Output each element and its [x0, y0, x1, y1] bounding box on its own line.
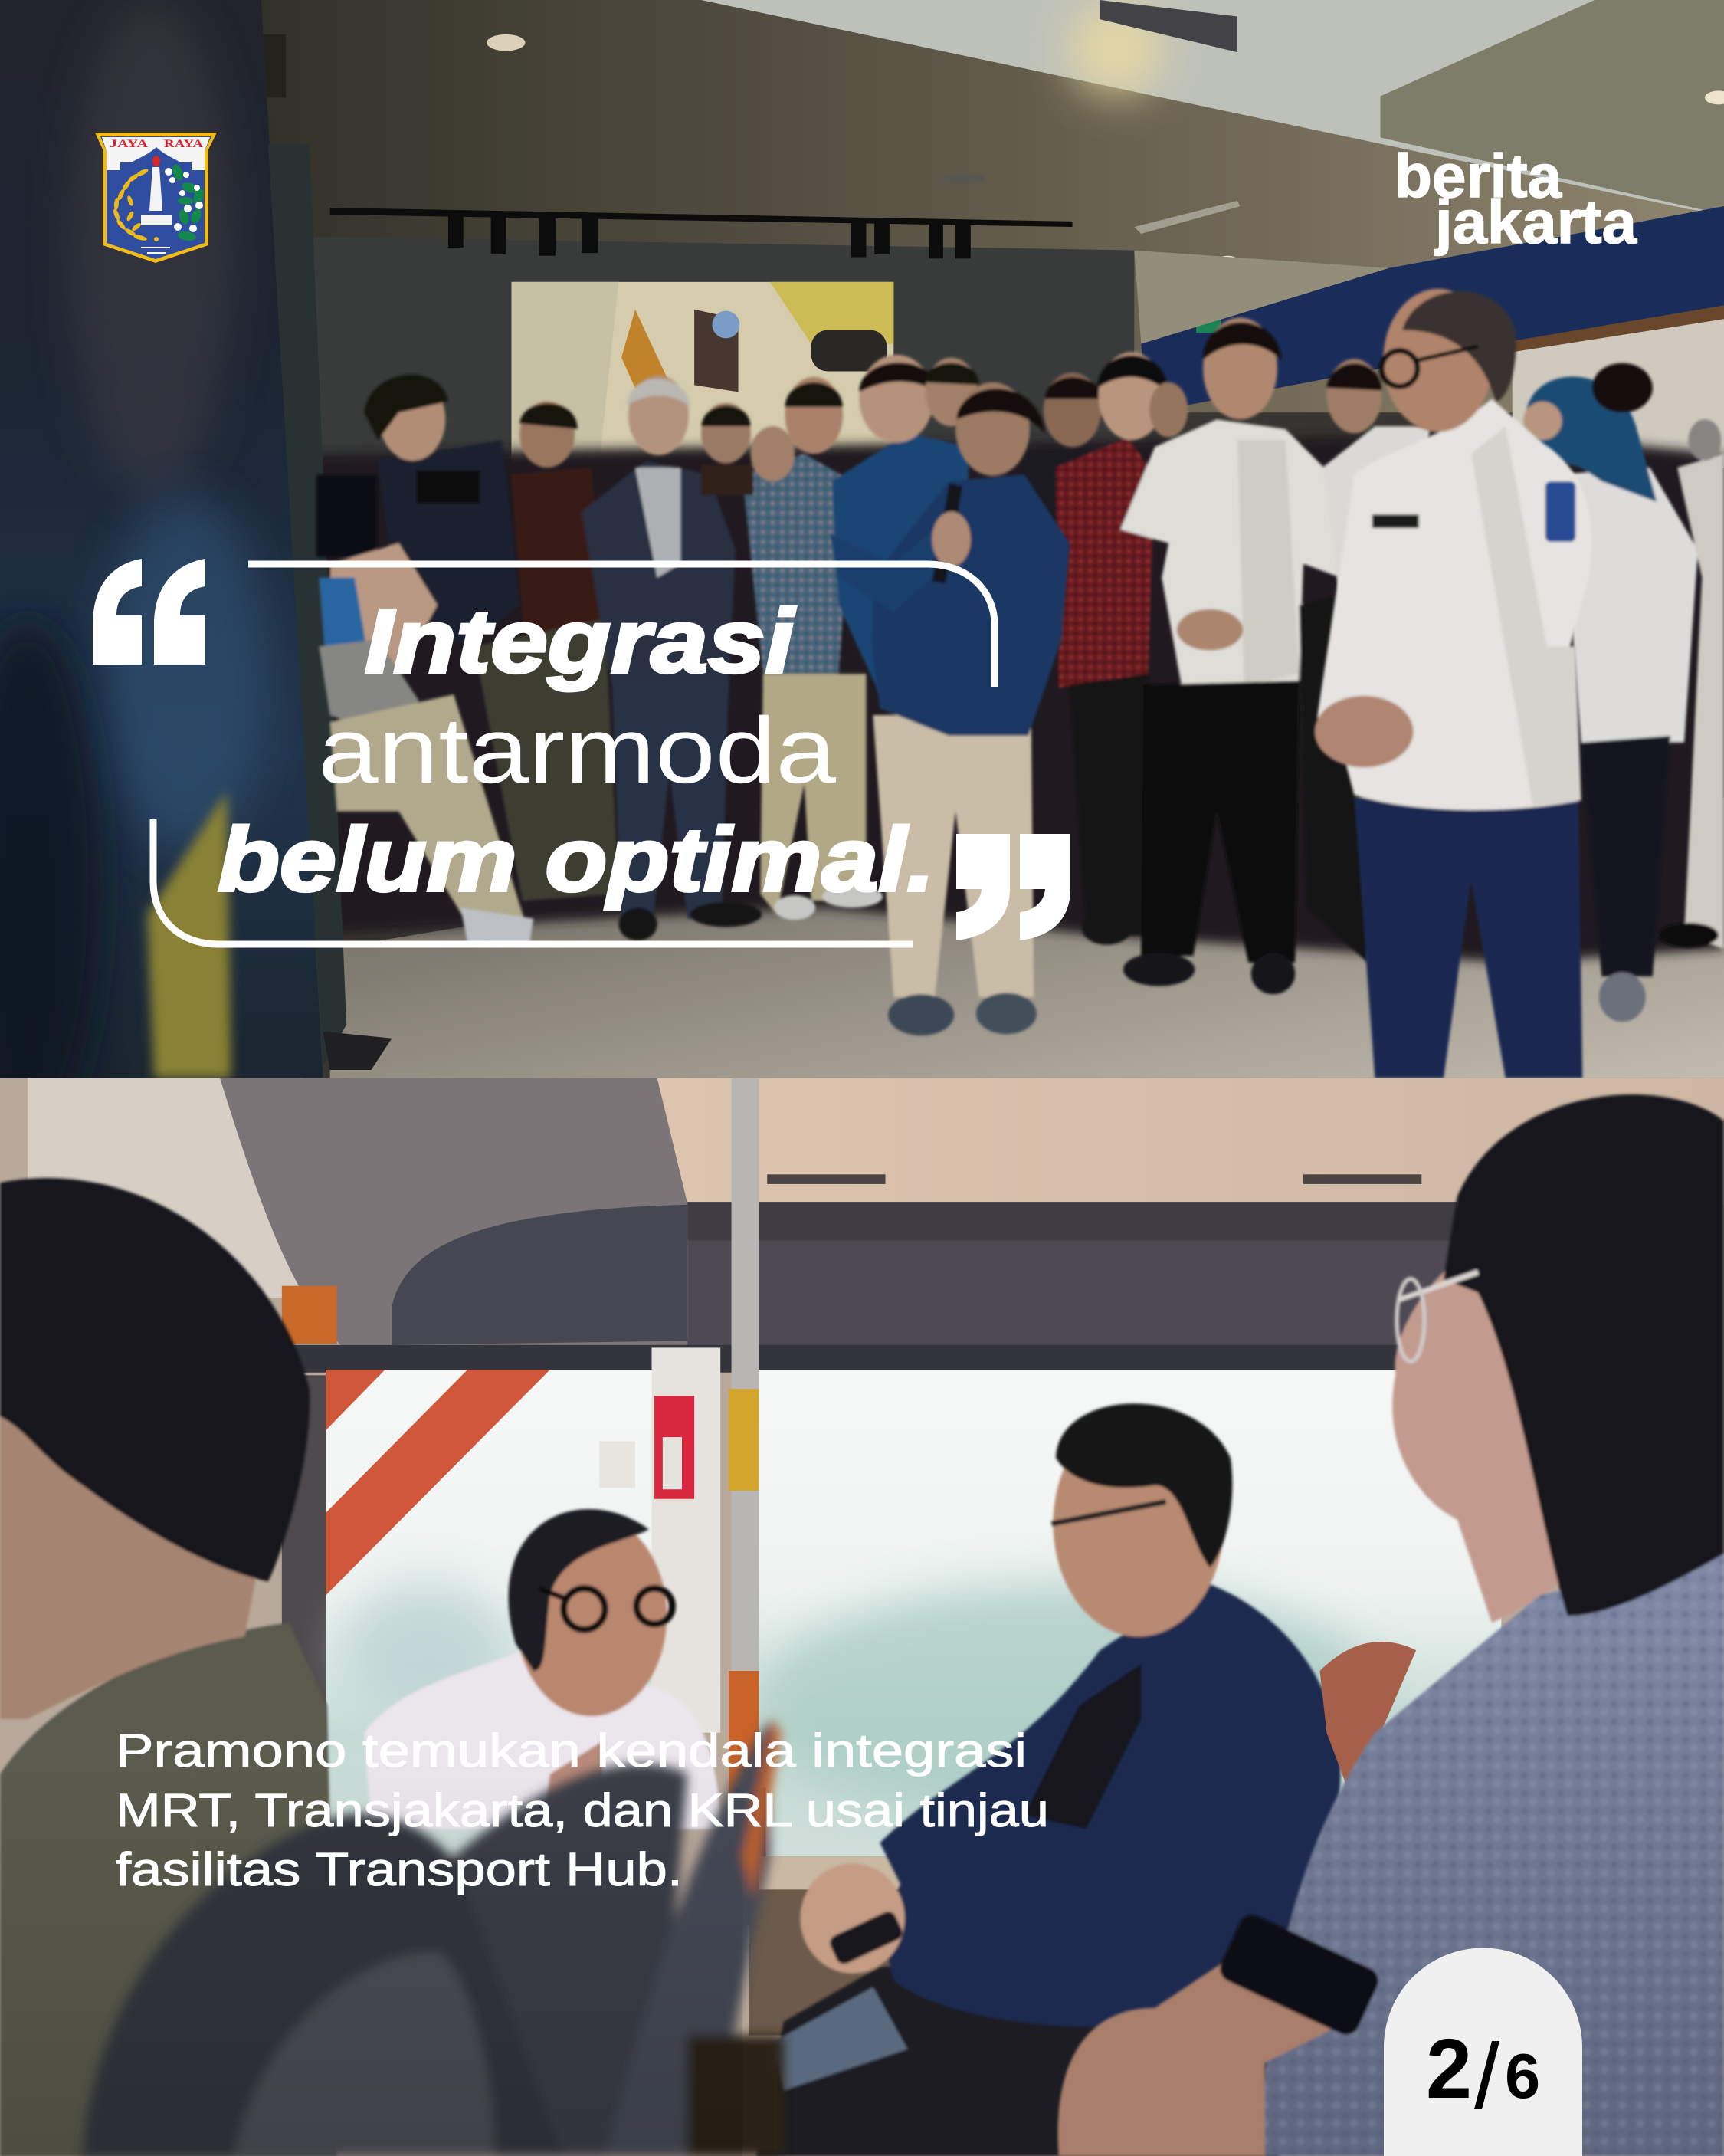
man in foreground left — [0, 1178, 337, 2156]
woman in foreground — [1057, 1094, 1724, 2156]
crowd backdrop — [313, 433, 1724, 963]
batik shirt man — [701, 377, 883, 920]
back wall — [313, 237, 1134, 578]
headline quote: Integrasi — [365, 591, 796, 692]
logo: berita jakarta — [1395, 142, 1637, 256]
panel: bottom photo inside the bus — [0, 1078, 1724, 2156]
floor — [330, 798, 1724, 1078]
page number badge — [1384, 1948, 1582, 2156]
speaker with microphone — [831, 382, 1070, 1035]
caption text: Pramono temukan kendala integrasi — [116, 1724, 1027, 1777]
wall below window — [749, 1856, 900, 2036]
photographers — [316, 375, 618, 946]
quote frame lines — [153, 564, 995, 944]
caption text: MRT, Transjakarta, dan KRL usai tinjau — [116, 1784, 1049, 1836]
track lights — [330, 208, 1073, 258]
page number badge: 6 — [1505, 2040, 1540, 2112]
right blue wall band — [1141, 206, 1724, 412]
man in navy jacket — [756, 1403, 1340, 2156]
logo: Jakarta crest Jaya Raya: JAYA — [110, 138, 148, 150]
caption text: fasilitas Transport Hub. — [116, 1843, 683, 1895]
icon: opening quotation mark — [93, 559, 205, 665]
right side staff — [1300, 359, 1724, 1022]
logo: berita jakarta: jakarta — [1434, 188, 1637, 256]
logo: Jakarta crest Jaya Raya: RAYA — [164, 138, 203, 150]
wall artwork poster — [511, 282, 893, 488]
ceiling — [261, 0, 1724, 412]
air vents — [767, 1174, 1421, 1184]
left wall mural — [0, 0, 392, 1141]
headline quote: belum optimal. — [218, 809, 935, 911]
windows — [326, 1370, 1501, 1858]
overhead luggage panel — [687, 1202, 1457, 1347]
panel: top photo of the inspection crowd — [0, 0, 1724, 1141]
front seat backs — [83, 1719, 784, 2156]
seat backs behind woman — [1320, 1642, 1416, 1788]
curved side panel — [220, 1078, 687, 1354]
window frame — [282, 1345, 1513, 1373]
grey hair man — [582, 376, 762, 940]
logo: Jakarta crest Jaya Raya — [95, 133, 217, 263]
headline quote — [218, 591, 935, 911]
batik red man — [1056, 352, 1188, 945]
blue shirt man behind speaker — [832, 355, 1103, 694]
bus ceiling — [657, 1078, 1724, 1205]
pillar and grab pole — [599, 1078, 765, 1925]
icon: closing quotation mark — [956, 834, 1070, 940]
governor in white uniform — [1314, 289, 1592, 1078]
page number badge: 2 — [1426, 2022, 1472, 2116]
Pramono seated by window — [364, 1509, 722, 1836]
white shirt man — [1120, 317, 1340, 994]
caption text — [116, 1724, 1049, 1895]
crowd of people in background — [316, 317, 1724, 1022]
headline quote: antarmoda — [318, 698, 836, 802]
logo: berita jakarta: berita — [1395, 142, 1562, 210]
